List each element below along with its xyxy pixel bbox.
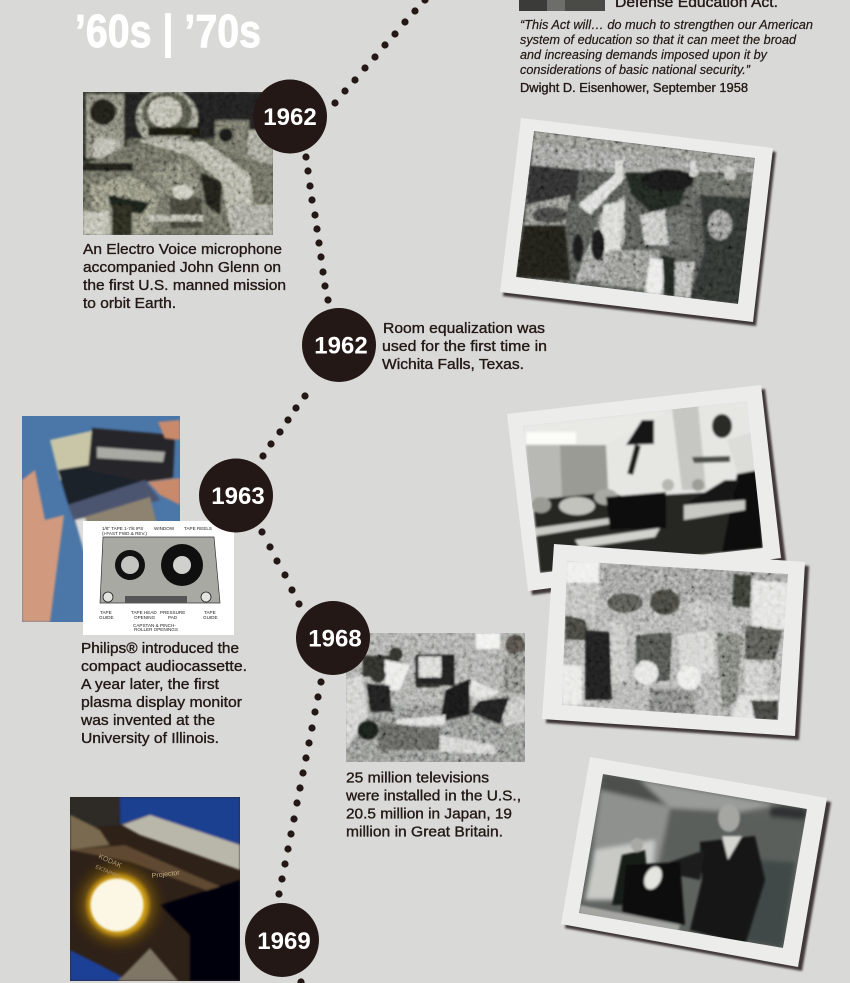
year marker 1968 [296,601,370,675]
photo card: classroom [507,385,786,595]
caption: John Glenn microphone [83,242,286,312]
year marker 1962 (John Glenn) [253,80,327,154]
quote: “This Act will… do much to strengthen our American [520,18,813,32]
diagram: compact cassette cutaway: (I-FAST FWD.& REV.) [102,531,147,536]
diagram: compact cassette cutaway [83,521,234,635]
photo: family watching television [346,633,525,762]
photo card: exhibition hall [500,118,776,326]
caption: televisions: million in Great Britain. [346,824,503,840]
year marker 1969: 1969 [257,928,311,955]
caption: Philips audiocassette: A year later, the first [81,677,219,693]
diagram: compact cassette cutaway: TAPE [100,610,112,615]
diagram: compact cassette cutaway: OPENING [134,615,156,620]
year marker 1968: 1968 [308,626,362,652]
year marker 1962 (room equalization): 1962 [314,332,368,360]
title: ’60s | ’70s [75,5,261,57]
caption: Philips audiocassette [80,641,247,747]
diagram: compact cassette cutaway: TAPE REELS [184,526,212,531]
year marker 1963: 1963 [211,483,265,510]
photo: Kodak Ektapro projector: Projector [151,870,181,880]
photo card: trade show crowd [542,544,809,740]
dotted timeline [258,0,429,983]
caption: televisions: 20.5 million in Japan, 19 [346,806,512,822]
diagram: compact cassette cutaway: PRESSURE [160,610,185,615]
photo card: presenter with projector [561,757,831,971]
caption: televisions [345,770,521,840]
quote [520,18,813,95]
caption: room equalization: used for the first time in [382,339,547,355]
diagram: compact cassette cutaway: PAD [168,615,178,620]
quote: and increasing demands imposed upon it by [520,48,768,62]
caption: Philips audiocassette: University of Illinois. [81,731,219,747]
year marker 1963 [199,458,273,532]
diagram: compact cassette cutaway: ROLLER OPENINGS [134,627,178,632]
diagram: compact cassette cutaway: WINDOW [154,526,175,531]
quote: system of education so that it can meet the broad [520,33,797,47]
caption: Philips audiocassette: was invented at the [80,713,215,729]
caption: televisions: 25 million televisions [346,770,489,786]
diagram: compact cassette cutaway: CAPSTAN & PINCH- [133,623,176,628]
caption: John Glenn microphone: to orbit Earth. [83,296,176,312]
photo: top portrait fragment [519,0,605,11]
photo: Kodak Ektapro projector: KODAK [97,853,123,870]
caption: televisions: were installed in the U.S., [345,788,521,804]
diagram: compact cassette cutaway: TAPE [204,610,216,615]
photo: John Glenn in capsule [83,89,273,235]
year marker 1962 (John Glenn): 1962 [263,104,317,131]
quote attribution: Dwight D. Eisenhower, September 1958 [520,81,748,95]
caption: room equalization: Wichita Falls, Texas. [382,357,524,373]
caption: Philips audiocassette: compact audiocassette. [81,659,247,675]
caption: room equalization [382,321,547,373]
photo: hands holding cassette recorder [22,416,180,622]
caption: John Glenn microphone: the first U.S. manned mission [83,278,286,294]
caption: Philips audiocassette: plasma display monitor [81,695,242,711]
diagram: compact cassette cutaway: 1/8" TAPE 1-7/8 IPS [102,526,143,531]
caption: John Glenn microphone: An Electro Voice microphone [83,242,282,258]
caption: room equalization: Room equalization was [383,321,545,337]
diagram: compact cassette cutaway: GUIDE [203,615,218,620]
year marker 1969 [245,903,319,977]
caption: John Glenn microphone: accompanied John Glenn on [83,260,281,276]
caption: Philips audiocassette: Philips® introduced the [81,641,239,657]
photo: Kodak Ektapro projector [70,797,240,981]
diagram: compact cassette cutaway: GUIDE [99,615,114,620]
photo: Kodak Ektapro projector: EKTAPRO [94,864,121,881]
quote: considerations of basic national security.” [520,63,751,77]
year marker 1962 (room equalization) [302,308,376,382]
diagram: compact cassette cutaway: TAPE HEAD [131,610,157,615]
